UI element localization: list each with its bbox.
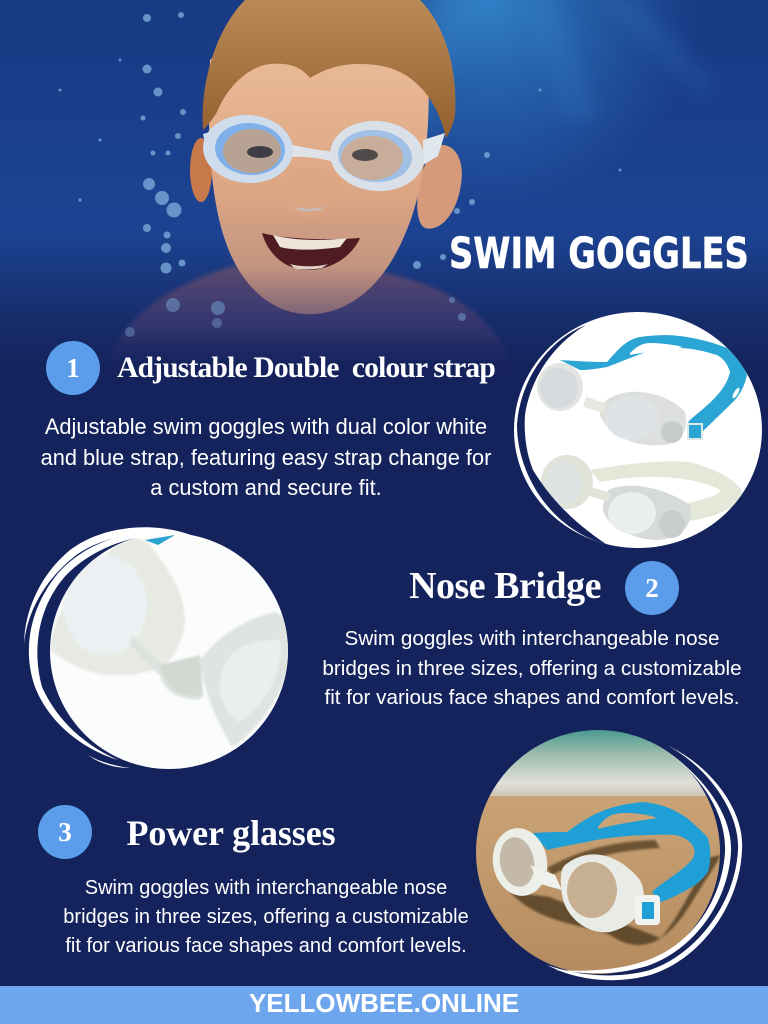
photo: goggles on sand bbox=[470, 728, 742, 980]
text: nose bridge: fit for various face shapes and comfort levels. bbox=[324, 686, 740, 709]
text: adjustable strap: and blue strap, featuring easy strap change for bbox=[41, 444, 491, 470]
text: nose bridge bbox=[322, 627, 742, 709]
heading: nose bridge: Nose Bridge bbox=[409, 565, 601, 607]
text: nose bridge: bridges in three sizes, offering a customizable bbox=[322, 656, 742, 680]
text: power glasses: fit for various face shapes and comfort levels. bbox=[65, 935, 467, 957]
text: power glasses: bridges in three sizes, offering a customizable bbox=[63, 906, 469, 928]
footer bar bbox=[0, 986, 768, 1024]
text: power glasses bbox=[63, 877, 469, 957]
title: SWIM GOGGLES bbox=[449, 229, 749, 279]
goggles on child bbox=[201, 112, 445, 195]
child portrait bbox=[105, 0, 515, 372]
photo: nose bridge closeup bbox=[24, 527, 290, 769]
photo: adjustable strap goggles bbox=[514, 312, 762, 548]
air bubbles bbox=[58, 12, 622, 337]
swooshes around photo 3 bbox=[547, 746, 742, 980]
number badge 2 bbox=[625, 561, 679, 615]
text: adjustable strap: Adjustable swim goggles with dual color white bbox=[45, 414, 487, 439]
number badge 1: 1 bbox=[66, 353, 80, 383]
swooshes around photo 2 bbox=[24, 527, 202, 643]
text: adjustable strap bbox=[41, 414, 492, 500]
text: power glasses: Swim goggles with interchangeable nose bbox=[85, 877, 447, 899]
number badge 3 bbox=[38, 805, 92, 859]
swoosh cut: navy crescent on photo 1 bbox=[517, 325, 606, 544]
number badge 1 bbox=[46, 341, 100, 395]
number badge 2: 2 bbox=[645, 573, 659, 603]
heading: power glasses: Power glasses bbox=[126, 813, 336, 853]
footer bar: YELLOWBEE.ONLINE bbox=[249, 988, 519, 1018]
text: adjustable strap: a custom and secure fit. bbox=[150, 475, 382, 500]
heading: adjustable strap: Adjustable Double colour strap bbox=[117, 352, 495, 384]
text: nose bridge: Swim goggles with interchangeable nose bbox=[345, 627, 719, 650]
number badge 3: 3 bbox=[58, 817, 72, 847]
